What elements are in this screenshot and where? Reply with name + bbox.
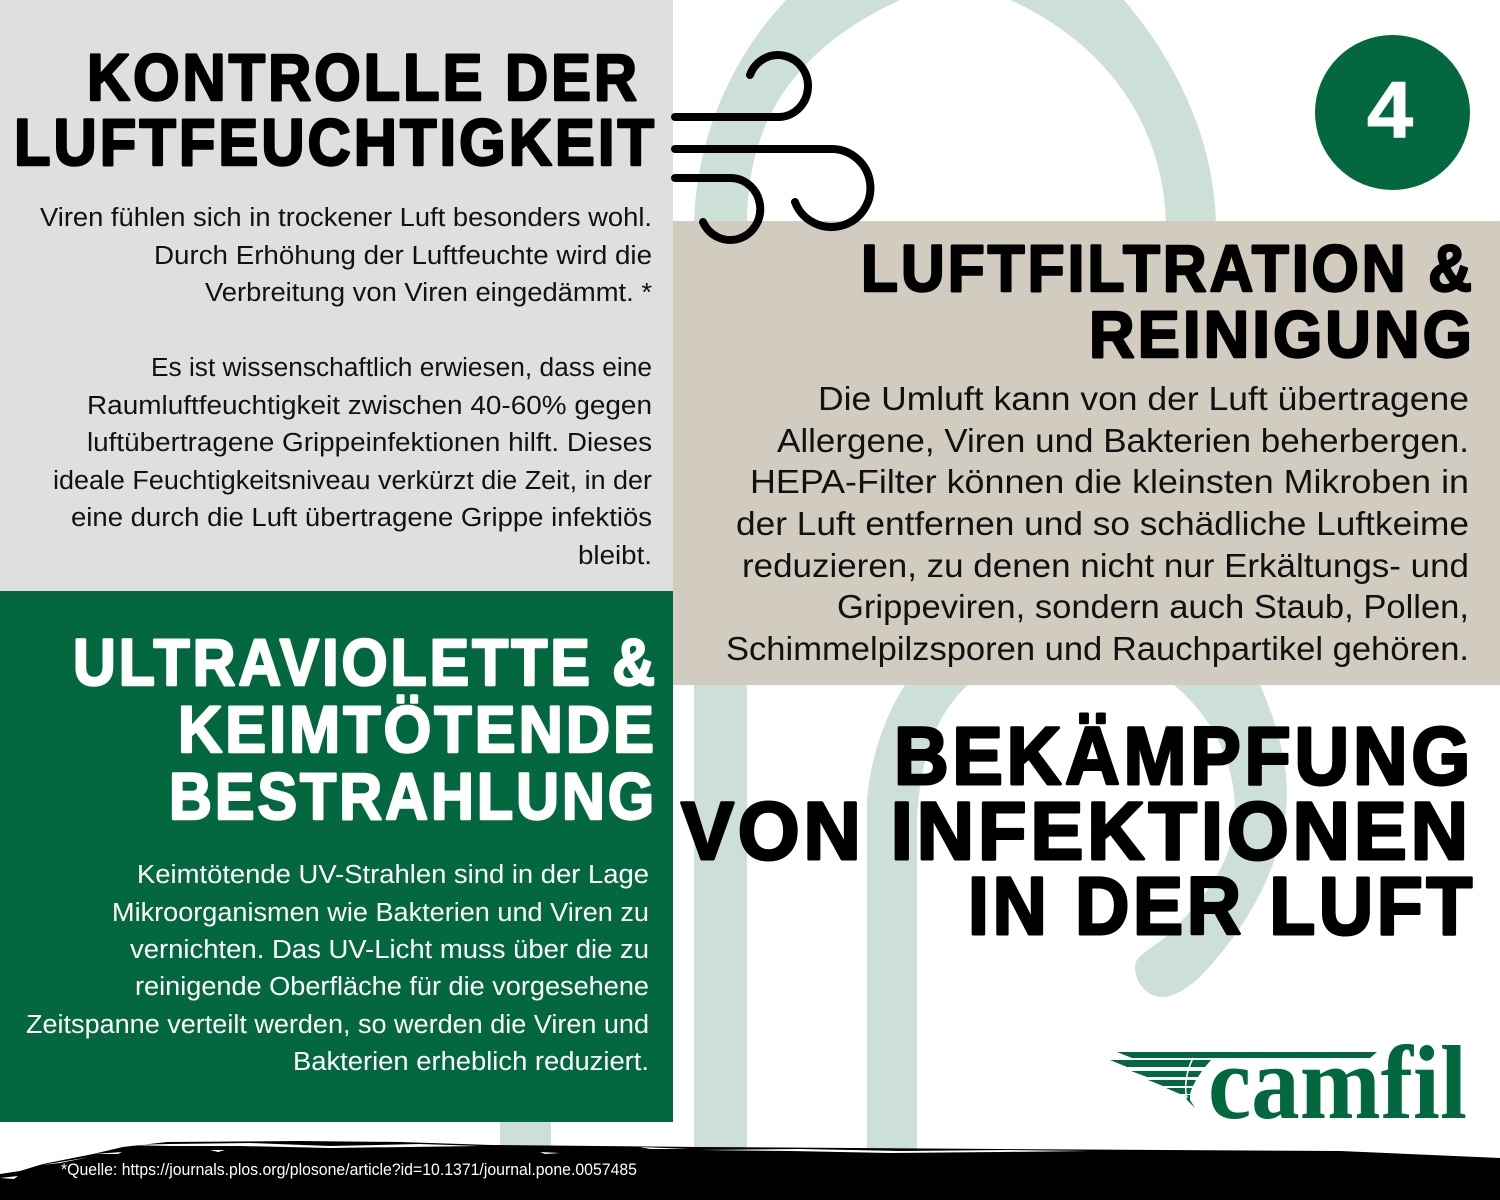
text block: Luftfeuchtigkeit: Raumluftfeuchtigkeit zwischen 40-60% gegen [87, 392, 652, 420]
heading: Ultraviolette und keimtötende Bestrahlung [73, 625, 658, 833]
text block: Luftfiltration: Die Umluft kann von der Luft übertragene [818, 380, 1469, 417]
text block: Luftfiltration: HEPA-Filter können die kleinsten Mikroben in [750, 463, 1469, 500]
panel: Kontrolle der Luftfeuchtigkeit [0, 0, 673, 591]
text block: Luftfeuchtigkeit: Verbreitung von Viren eingedämmt. * [205, 279, 652, 307]
text block: Luftfeuchtigkeit: Durch Erhöhung der Luftfeuchte wird die [154, 242, 652, 270]
main title: VON INFEKTIONEN [681, 786, 1472, 877]
badge: number 4: 4 [1367, 65, 1414, 154]
text block: UV-Strahlen [26, 861, 649, 1076]
footer: black brush band with source [0, 1141, 1500, 1200]
heading: Ultraviolette und keimtötende Bestrahlung: KEIMTÖTENDE [178, 692, 657, 766]
text block: Luftfeuchtigkeit: luftübertragene Grippeinfektionen hilft. Dieses [87, 429, 652, 457]
icon: wind [675, 55, 870, 240]
heading: Kontrolle der Luftfeuchtigkeit: LUFTFEUCHTIGKEIT [14, 105, 657, 179]
text block: Luftfeuchtigkeit: eine durch die Luft übertragene Grippe infektiös [71, 504, 652, 532]
heading: Ultraviolette und keimtötende Bestrahlung: ULTRAVIOLETTE & [73, 625, 658, 699]
text block: UV-Strahlen: vernichten. Das UV-Licht muss über die zu [130, 936, 649, 964]
text block: UV-Strahlen: Bakterien erheblich reduziert. [293, 1048, 649, 1076]
text block: UV-Strahlen: reinigende Oberfläche für die vorgesehene [135, 973, 649, 1001]
text block: Luftfiltration: Schimmelpilzsporen und Rauchpartikel gehören. [726, 630, 1469, 667]
text block: Luftfeuchtigkeit: ideale Feuchtigkeitsniveau verkürzt die Zeit, in der [53, 467, 653, 495]
text block: Luftfiltration: reduzieren, zu denen nicht nur Erkältungs- und [742, 547, 1469, 584]
text block: Luftfeuchtigkeit [40, 204, 653, 570]
badge: number 4 [1315, 35, 1470, 190]
text block: Luftfiltration: der Luft entfernen und so schädliche Luftkeime [736, 505, 1469, 542]
text block: Luftfeuchtigkeit: Viren fühlen sich in trockener Luft besonders wohl. [40, 204, 652, 232]
logo: camfil: camfil [1208, 1024, 1467, 1141]
text block: Luftfiltration: Grippeviren, sondern auch Staub, Pollen, [837, 588, 1469, 625]
heading: Kontrolle der Luftfeuchtigkeit: KONTROLLE DER [87, 40, 640, 114]
panel: Ultraviolette und keimtötende Bestrahlung [0, 591, 673, 1122]
text block: Luftfeuchtigkeit: Es ist wissenschaftlich erwiesen, dass eine [151, 354, 652, 382]
text block: UV-Strahlen: Zeitspanne verteilt werden, so werden die Viren und [26, 1011, 649, 1039]
background watermark: pale green arcs [500, 0, 1287, 1160]
heading: Kontrolle der Luftfeuchtigkeit [14, 40, 657, 179]
main title [681, 711, 1476, 952]
logo: camfil [1110, 1024, 1467, 1141]
text block: Luftfiltration [726, 380, 1469, 667]
heading: Ultraviolette und keimtötende Bestrahlung: BESTRAHLUNG [169, 759, 657, 833]
heading: Luftfiltration und Reinigung [861, 231, 1475, 371]
panel: Luftfiltration und Reinigung [673, 221, 1500, 685]
text block: Luftfiltration: Allergene, Viren und Bakterien beherbergen. [777, 422, 1469, 459]
text block: Luftfeuchtigkeit: bleibt. [578, 542, 652, 570]
heading: Luftfiltration und Reinigung: REINIGUNG [1089, 297, 1475, 371]
text block: UV-Strahlen: Mikroorganismen wie Bakterien und Viren zu [112, 899, 649, 927]
source note: *Quelle: https://journals.plos.org/plosone/article?id=10.1371/journal.pone.0057485 [61, 1161, 637, 1179]
text block: UV-Strahlen: Keimtötende UV-Strahlen sind in der Lage [137, 861, 649, 889]
